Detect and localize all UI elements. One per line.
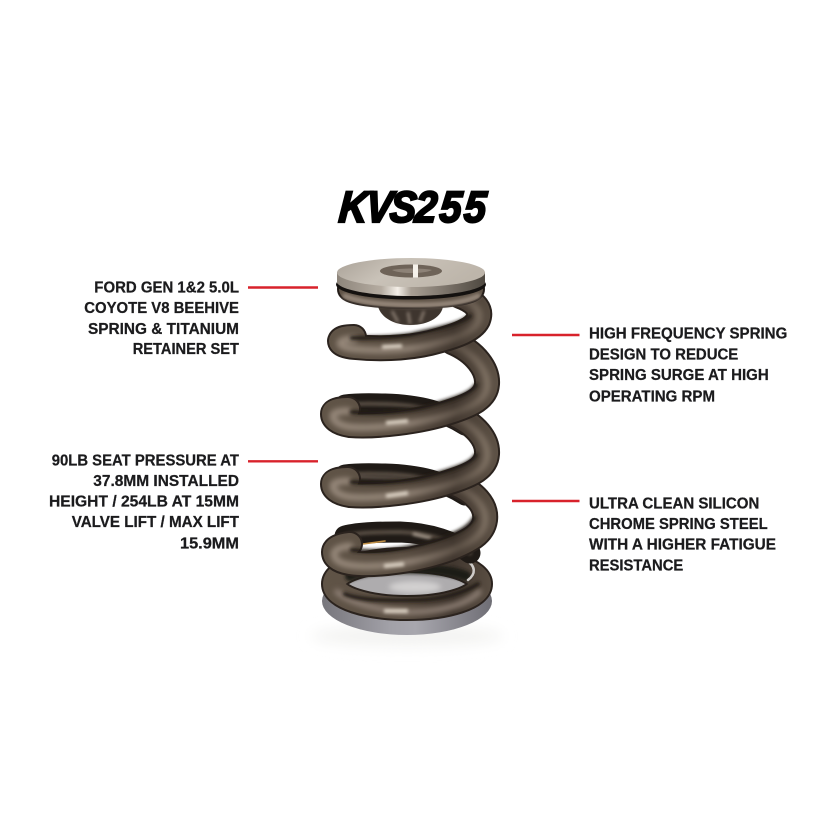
text block: high frequency design (589, 325, 787, 405)
text block: application (84, 280, 239, 358)
leader line: application (248, 286, 318, 289)
retainer centre bore (380, 264, 442, 278)
text block: high frequency design: DESIGN TO REDUCE (589, 346, 738, 363)
interior glints (352, 477, 440, 544)
callout: high frequency design (512, 325, 787, 405)
coil C front (333, 342, 487, 427)
text block: seat pressure (49, 453, 240, 552)
leader line: spring steel (512, 500, 580, 502)
rear spring strands (345, 404, 470, 553)
retainer rim (337, 272, 485, 296)
text block: spring steel (589, 495, 776, 575)
title: KVS255 (337, 182, 489, 231)
seat disk (343, 564, 471, 604)
retainer stem cup (378, 306, 443, 325)
illustration: valve spring and retainer (311, 258, 503, 646)
coil E front (334, 484, 485, 566)
text block: application: COYOTE V8 BEEHIVE (84, 300, 239, 317)
text block: application: RETAINER SET (133, 341, 239, 358)
retainer top face (337, 258, 485, 287)
text block: application: SPRING & TITANIUM (88, 321, 239, 338)
leader line: seat pressure (248, 460, 318, 462)
titanium retainer (336, 258, 486, 300)
text block: spring steel: RESISTANCE (589, 558, 683, 575)
leader line: high frequency design (512, 334, 580, 336)
retainer shadow line (336, 270, 486, 300)
base plate (322, 567, 492, 635)
text block: high frequency design: HIGH FREQUENCY SPRING (589, 325, 787, 342)
callout: seat pressure (49, 453, 318, 552)
text block: seat pressure: HEIGHT / 254LB AT 15MM (49, 494, 239, 511)
callout: spring steel (512, 495, 776, 575)
text block: spring steel: WITH A HIGHER FATIGUE (589, 537, 776, 554)
text block: seat pressure: 37.8MM INSTALLED (93, 473, 239, 490)
text block: seat pressure: 15.9MM (180, 535, 239, 552)
soft ground shadow (311, 626, 503, 646)
text block: high frequency design: SPRING SURGE AT HIGH (589, 367, 769, 384)
text block: spring steel: ULTRA CLEAN SILICON (589, 495, 759, 512)
callout: application (84, 280, 318, 358)
top coil ring (345, 280, 478, 305)
text block: application: FORD GEN 1&2 5.0L (94, 280, 239, 297)
base coil (334, 560, 480, 612)
text block: high frequency design: OPERATING RPM (589, 388, 715, 405)
text block: seat pressure: 90LB SEAT PRESSURE AT (52, 453, 240, 470)
text block: seat pressure: VALVE LIFT / MAX LIFT (72, 514, 240, 531)
coil D front (333, 414, 487, 497)
coil B front (340, 296, 479, 350)
text block: spring steel: CHROME SPRING STEEL (589, 516, 768, 533)
